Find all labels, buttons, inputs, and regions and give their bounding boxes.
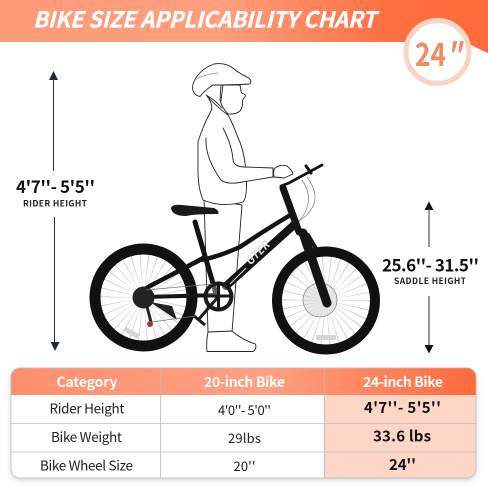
- size badge: [406, 20, 469, 84]
- saddle: [171, 205, 218, 216]
- header labels: [56, 372, 443, 392]
- rider helmet: [192, 64, 251, 96]
- 24-inch values: 24'': [389, 454, 416, 475]
- rider head: [220, 85, 246, 114]
- 24-inch values: 4'7''- 5'5'': [364, 397, 441, 418]
- rider height arrow and label: 4'7''- 5'5'': [16, 173, 95, 198]
- rider hand: [274, 165, 293, 178]
- bicycle: [95, 165, 375, 350]
- rider neck strap: [206, 85, 223, 108]
- table body: [11, 368, 476, 478]
- size badge: 24": [415, 30, 464, 76]
- 20-inch values: 20'': [234, 456, 256, 475]
- saddle height arrow and label: [382, 202, 479, 354]
- crank and chainring: [194, 284, 232, 325]
- rider arm: [206, 128, 273, 183]
- rider torso: [198, 96, 247, 205]
- table: [11, 368, 476, 480]
- front wheel: [277, 252, 375, 350]
- 20-inch values: 29lbs: [228, 428, 261, 447]
- rear wheel: [95, 249, 192, 346]
- brake cables: [280, 177, 315, 235]
- 24-inch values: [364, 397, 441, 475]
- saddle height arrow and label: 25.6''- 31.5'': [382, 252, 479, 276]
- rear cassette and derailleur: [132, 284, 213, 327]
- rider shoe: [207, 331, 256, 352]
- rider height arrow and label: RIDER HEIGHT: [23, 198, 88, 210]
- row labels: [40, 398, 133, 474]
- row labels: Bike Wheel Size: [40, 454, 133, 474]
- 20-inch values: [218, 400, 271, 475]
- frame: [145, 165, 327, 303]
- rider line drawing: [192, 64, 293, 352]
- row labels: Bike Weight: [51, 426, 122, 446]
- header labels: 20-inch Bike: [204, 372, 285, 392]
- 20-inch values: 4'0''- 5'0'': [218, 400, 271, 419]
- table shadow: [11, 370, 476, 480]
- row labels: Rider Height: [50, 398, 124, 418]
- header band: [0, 0, 488, 53]
- frame logo: GTER: [242, 236, 274, 269]
- rider leg: [204, 198, 242, 332]
- saddle height arrow and label: SADDLE HEIGHT: [394, 275, 467, 287]
- table header: [11, 368, 476, 395]
- 24-inch values: 33.6 lbs: [373, 426, 431, 446]
- header labels: Category: [56, 372, 118, 392]
- title: BIKE SIZE APPLICABILITY CHART: [33, 2, 380, 34]
- header labels: 24-inch Bike: [363, 372, 443, 392]
- rider height arrow and label: [16, 71, 95, 351]
